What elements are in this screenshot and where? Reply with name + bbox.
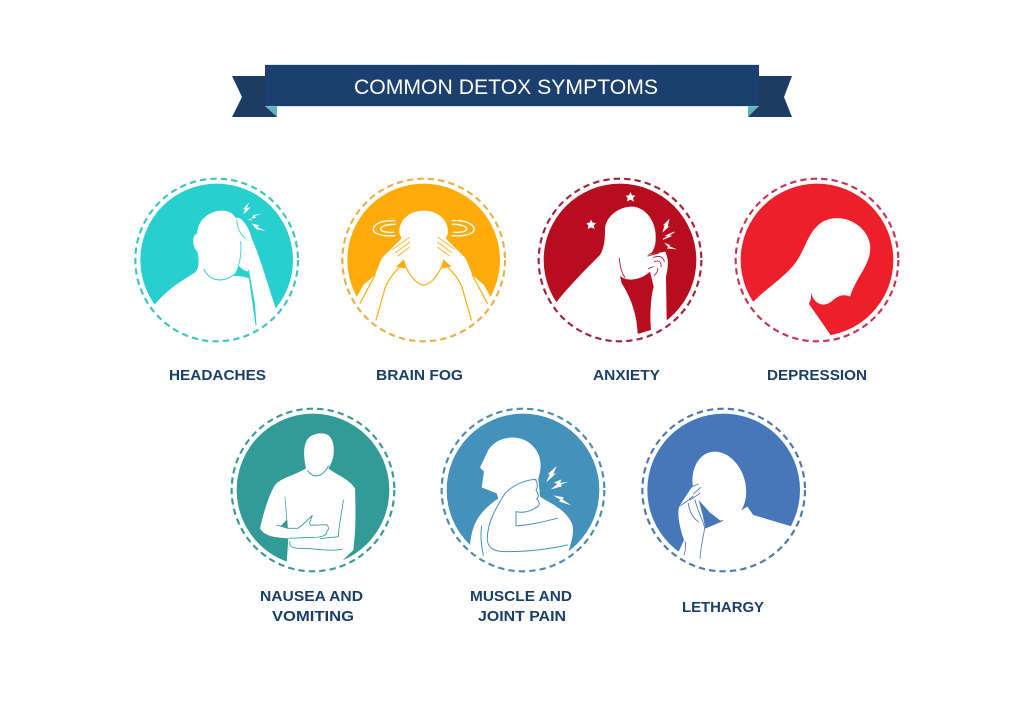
icon: brain fog figure (342, 179, 505, 343)
icon: anxiety figure (539, 179, 701, 343)
icon: depression figure (736, 179, 898, 345)
label: HEADACHES (169, 367, 266, 384)
label: NAUSEA AND (260, 588, 363, 605)
label: MUSCLE AND (470, 588, 572, 605)
label: VOMITING (272, 608, 354, 625)
icon: headache figure (135, 179, 298, 343)
label: LETHARGY (682, 599, 764, 616)
icon: muscle pain figure (442, 409, 604, 575)
panel: muscle and joint pain (442, 409, 604, 625)
label: JOINT PAIN (478, 608, 566, 625)
icon: nausea figure (232, 409, 394, 573)
panel: brain fog (342, 179, 505, 384)
label (260, 588, 363, 625)
icon: lethargy figure (642, 409, 805, 575)
label: DEPRESSION (767, 367, 867, 384)
label: BRAIN FOG (376, 367, 463, 384)
title banner (232, 64, 792, 117)
label (470, 588, 572, 625)
title: COMMON DETOX SYMPTOMS (354, 75, 658, 99)
panel: nausea and vomiting (232, 409, 394, 625)
panel: lethargy (642, 409, 805, 616)
label: ANXIETY (593, 367, 660, 384)
panel: depression (736, 179, 898, 384)
panel: anxiety (539, 179, 701, 384)
panel: headaches (135, 179, 298, 384)
